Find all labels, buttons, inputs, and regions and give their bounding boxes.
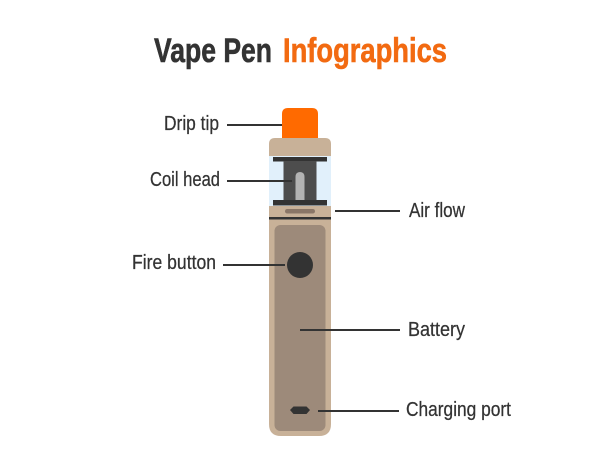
label: air flow [335,200,465,222]
vape pen device [269,108,331,436]
fire button [287,252,313,278]
air flow slot [285,209,315,214]
glass tank [269,156,331,207]
label: air flow: Air flow [409,200,465,222]
label: charging port: Charging port [406,399,511,421]
divider line [269,217,331,220]
label: battery: Battery [408,319,465,341]
label: drip tip [164,113,282,135]
title: Vape Pen [154,32,272,70]
battery body [269,219,331,436]
top cap [269,138,331,156]
drip tip [282,108,318,138]
label: coil head: Coil head [150,169,220,191]
title [154,32,447,70]
battery panel [274,225,326,431]
title: Infographics [283,32,447,70]
charging port [290,406,310,414]
label: drip tip: Drip tip [164,113,219,135]
air flow collar [269,206,331,218]
coil head [273,157,327,206]
label: fire button: Fire button [132,252,216,274]
